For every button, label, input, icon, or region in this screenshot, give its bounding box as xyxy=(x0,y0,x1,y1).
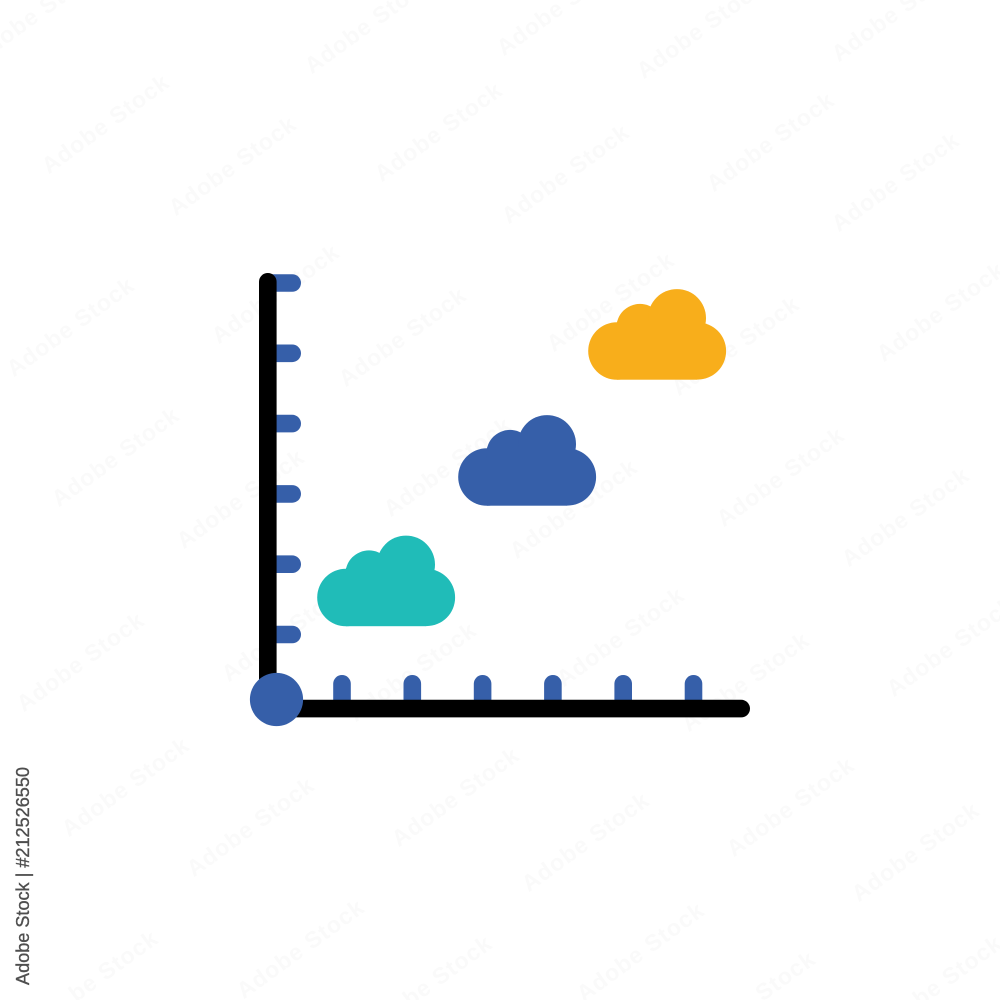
watermark pattern: Adobe Stock xyxy=(333,281,471,392)
origin dot xyxy=(250,673,303,726)
watermark pattern: Adobe Stock xyxy=(171,443,309,554)
watermark pattern: Adobe Stock xyxy=(676,626,814,737)
watermark pattern: Adobe Stock xyxy=(36,68,174,179)
watermark pattern: Adobe Stock xyxy=(826,126,964,237)
y-axis tick marks xyxy=(262,274,301,643)
watermark pattern: Adobe Stock xyxy=(369,76,507,187)
watermark pattern: Adobe Stock xyxy=(496,118,634,229)
icon: blue cloud xyxy=(458,415,596,506)
watermark pattern: Adobe Stock xyxy=(56,731,194,842)
watermark pattern: Adobe Stock xyxy=(378,411,516,522)
watermark pattern: Adobe Stock xyxy=(721,751,859,862)
watermark pattern: Adobe Stock xyxy=(386,741,524,852)
watermark pattern: Adobe Stock xyxy=(504,453,642,564)
watermark pattern: Adobe Stock xyxy=(163,110,301,221)
watermark pattern: Adobe Stock xyxy=(11,606,149,717)
watermark pattern: Adobe Stock xyxy=(551,581,689,692)
watermark pattern: Adobe Stock xyxy=(701,86,839,197)
watermark pattern: Adobe Stock xyxy=(343,616,481,727)
icon: teal cloud xyxy=(317,536,455,626)
y axis xyxy=(259,273,277,717)
x axis xyxy=(259,700,750,717)
watermark pattern: Adobe Stock xyxy=(836,461,974,572)
watermark pattern: Adobe Stock xyxy=(666,290,804,401)
watermark pattern: Adobe Stock xyxy=(711,421,849,532)
icon: yellow cloud xyxy=(588,289,726,380)
x-axis tick marks xyxy=(333,675,702,711)
watermark pattern: Adobe Stock xyxy=(516,786,654,897)
watermark pattern: Adobe Stock xyxy=(46,401,184,512)
watermark pattern: Adobe Stock xyxy=(206,238,344,349)
watermark pattern: Adobe Stock xyxy=(1,271,139,382)
watermark pattern: Adobe Stock xyxy=(181,771,319,882)
watermark pattern: Adobe Stock xyxy=(541,246,679,357)
watermark pattern: Adobe Stock xyxy=(846,796,984,907)
stock id label: Adobe Stock | #212526550 xyxy=(13,767,33,985)
watermark pattern: Adobe Stock xyxy=(216,576,354,687)
